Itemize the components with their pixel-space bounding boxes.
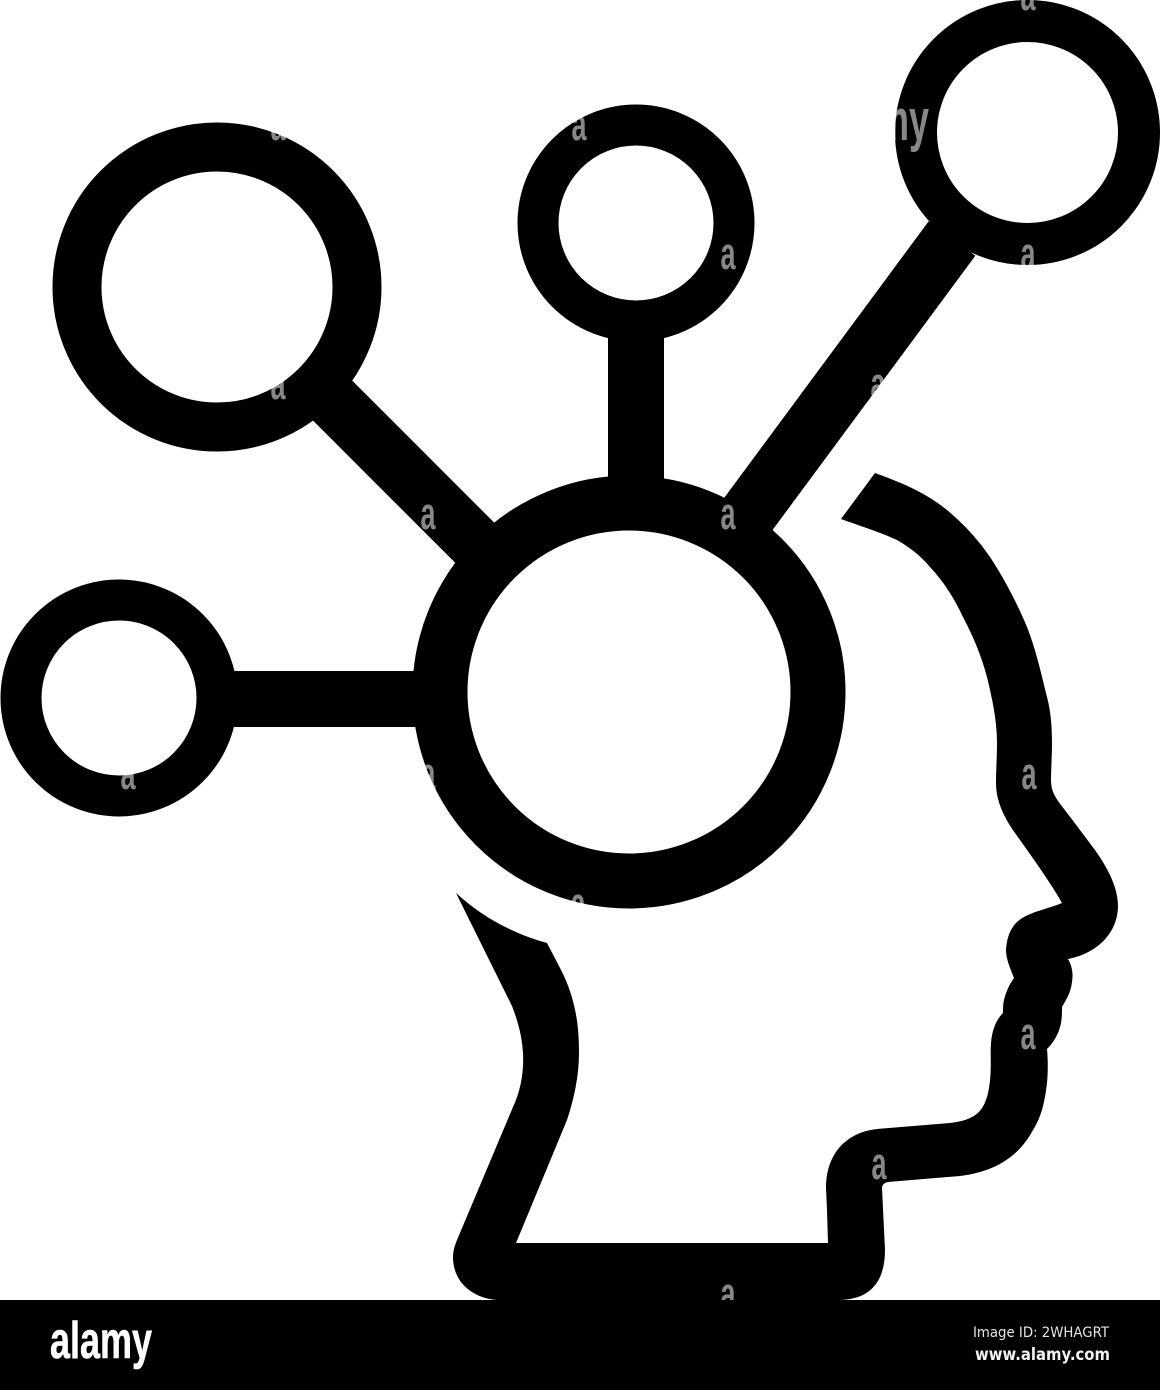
node: top-centre circle — [538, 125, 734, 321]
watermark letters on icon: a — [720, 228, 736, 279]
watermark letters on icon: a — [1022, 748, 1037, 799]
watermark letters on icon: a — [570, 878, 586, 929]
watermark letters on icon: a — [120, 748, 136, 799]
watermark letters on icon: a — [870, 358, 886, 409]
connector: top-left node to hub — [330, 398, 490, 558]
watermark letters on icon — [120, 0, 1037, 1319]
node: top-right circle — [916, 21, 1139, 244]
watermark letters on icon: a — [720, 1268, 736, 1319]
footer: alamy logo: alamy — [50, 1312, 152, 1370]
watermark letters on icon: alamy — [827, 88, 929, 153]
watermark letters on icon: a — [872, 1138, 887, 1189]
head profile outline — [453, 473, 1118, 1300]
footer bar — [0, 1300, 1160, 1390]
watermark letters on icon: a — [420, 748, 436, 799]
connector: left node to hub — [225, 671, 440, 727]
connector: top-right node to hub — [735, 238, 952, 532]
watermark letters on icon: a — [420, 488, 436, 539]
watermark letters on icon: a — [720, 488, 736, 539]
watermark letters on icon: a — [1020, 228, 1036, 279]
footer: website: www.alamy.com — [975, 1345, 1110, 1365]
node: central hub circle — [440, 503, 818, 881]
watermark letters on icon: a — [270, 99, 286, 150]
watermark letters on icon: a — [1020, 1008, 1036, 1059]
connector: top-centre node to hub — [608, 330, 664, 510]
watermark letters on icon: a — [572, 99, 587, 150]
watermark letters on icon: a — [270, 358, 286, 409]
node: top-left circle — [77, 147, 357, 427]
node: left circle — [21, 600, 217, 796]
footer: image ID: Image ID: 2WHAGRT — [973, 1325, 1109, 1341]
